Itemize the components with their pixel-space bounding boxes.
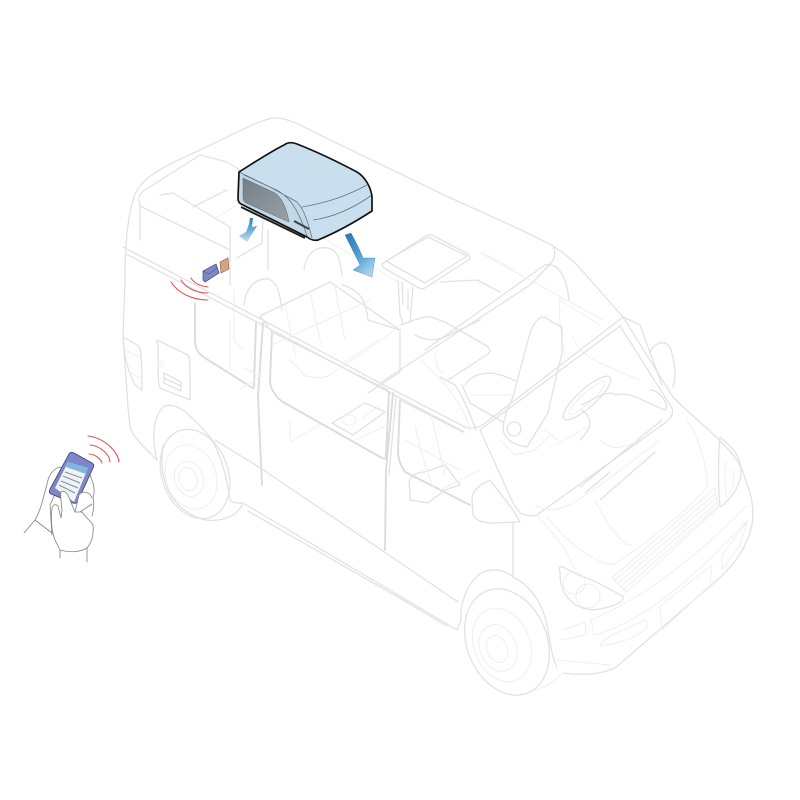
roof air conditioner unit — [238, 143, 372, 240]
small air-flow arrow — [239, 218, 257, 242]
side windows — [195, 303, 513, 577]
grey vent grille — [243, 178, 289, 222]
unit outline — [238, 143, 372, 240]
unit body — [238, 143, 372, 240]
hands holding smartphone — [24, 452, 94, 562]
van outline illustration — [123, 118, 753, 708]
front wheel — [449, 576, 565, 708]
rear wheel — [148, 419, 243, 529]
rear door panel with lamp and louvres — [123, 337, 190, 400]
front end: headlamps, grille and bumper — [535, 420, 748, 670]
large air-flow arrow — [345, 233, 375, 277]
side face — [238, 172, 311, 238]
front hand — [51, 491, 93, 562]
orange control module — [220, 258, 229, 273]
windshield — [480, 326, 673, 516]
front seats, steering wheel and dashboard — [405, 317, 666, 503]
back hand — [24, 467, 94, 535]
blue receiver module — [203, 264, 219, 282]
base shadow — [241, 207, 305, 238]
wireless signal from phone — [88, 436, 119, 463]
roof-mounted satellite panel — [382, 235, 515, 380]
van body shell — [123, 118, 753, 674]
rear seats and console — [234, 248, 400, 442]
smartphone — [49, 452, 94, 503]
wing mirror — [472, 480, 520, 523]
logo on unit — [294, 221, 309, 229]
unit panel lines — [239, 172, 372, 238]
wireless signal from receiver — [171, 278, 208, 300]
